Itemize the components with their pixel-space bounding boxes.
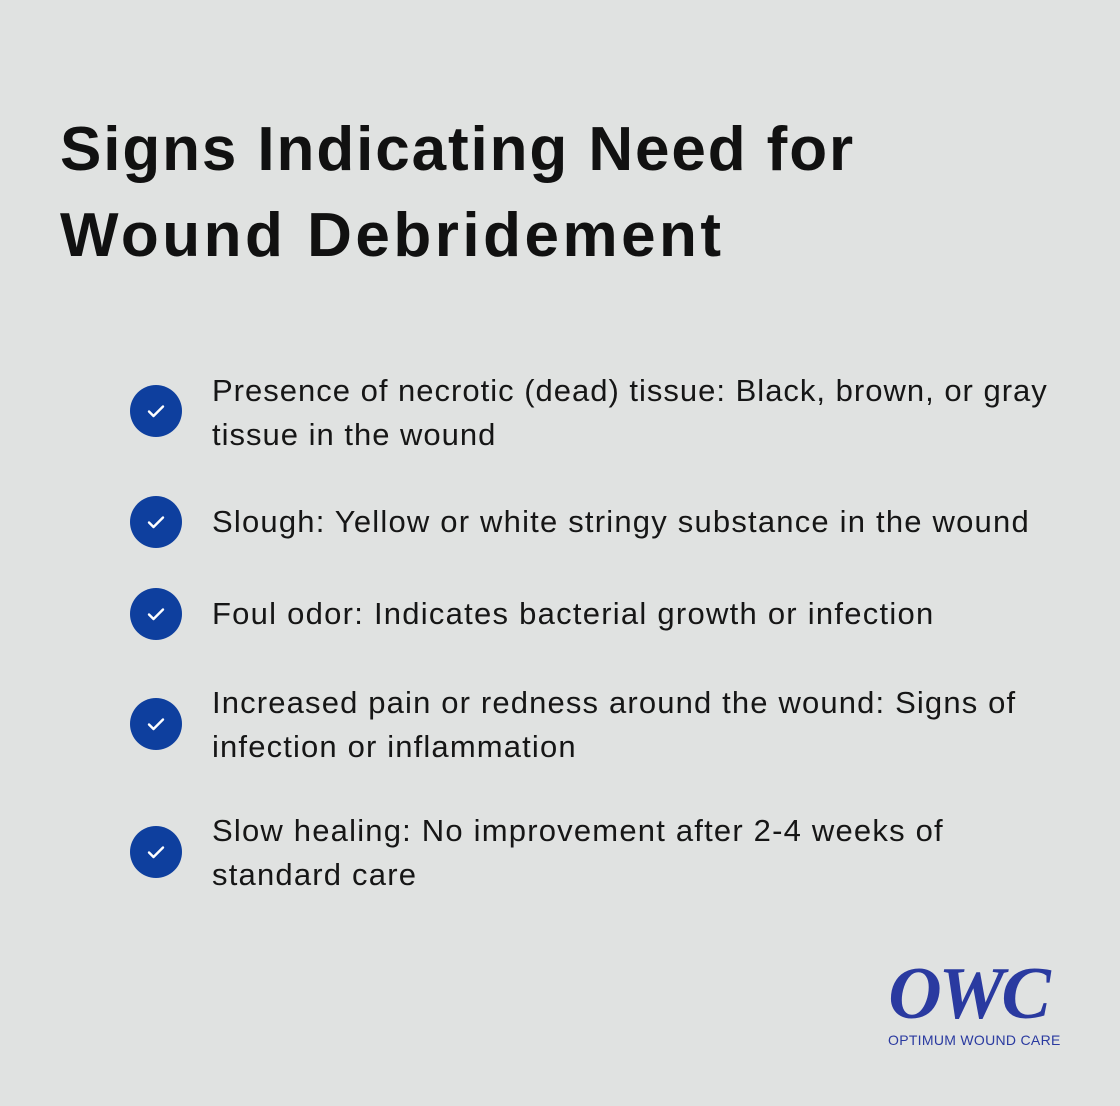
item 4 [130, 685, 1016, 764]
item 2 [130, 496, 1030, 548]
title [60, 115, 855, 270]
icon: check [130, 385, 182, 437]
text: standard care [212, 857, 417, 892]
text [212, 813, 944, 892]
text: Increased pain or redness around the wound: Signs of [212, 685, 1016, 720]
text: tissue in the wound [212, 417, 496, 452]
text: Foul odor: Indicates bacterial growth or infection [212, 596, 934, 631]
title: Wound Debridement [60, 201, 725, 270]
text [212, 685, 1016, 764]
text: infection or inflammation [212, 729, 577, 764]
text: Slough: Yellow or white stringy substance in the wound [212, 504, 1030, 539]
text [212, 373, 1048, 452]
icon: check [130, 826, 182, 878]
logo text: OPTIMUM WOUND CARE [888, 1032, 1061, 1048]
icon: check [130, 698, 182, 750]
item 5 [130, 813, 944, 892]
item 1 [130, 373, 1048, 452]
title: Signs Indicating Need for [60, 115, 855, 184]
text: Slow healing: No improvement after 2-4 weeks of [212, 813, 944, 848]
logo mark: OWC [888, 953, 1048, 1035]
logo [888, 953, 1061, 1048]
icon: check [130, 496, 182, 548]
text: Presence of necrotic (dead) tissue: Black, brown, or gray [212, 373, 1048, 408]
icon: check [130, 588, 182, 640]
item 3 [130, 588, 934, 640]
